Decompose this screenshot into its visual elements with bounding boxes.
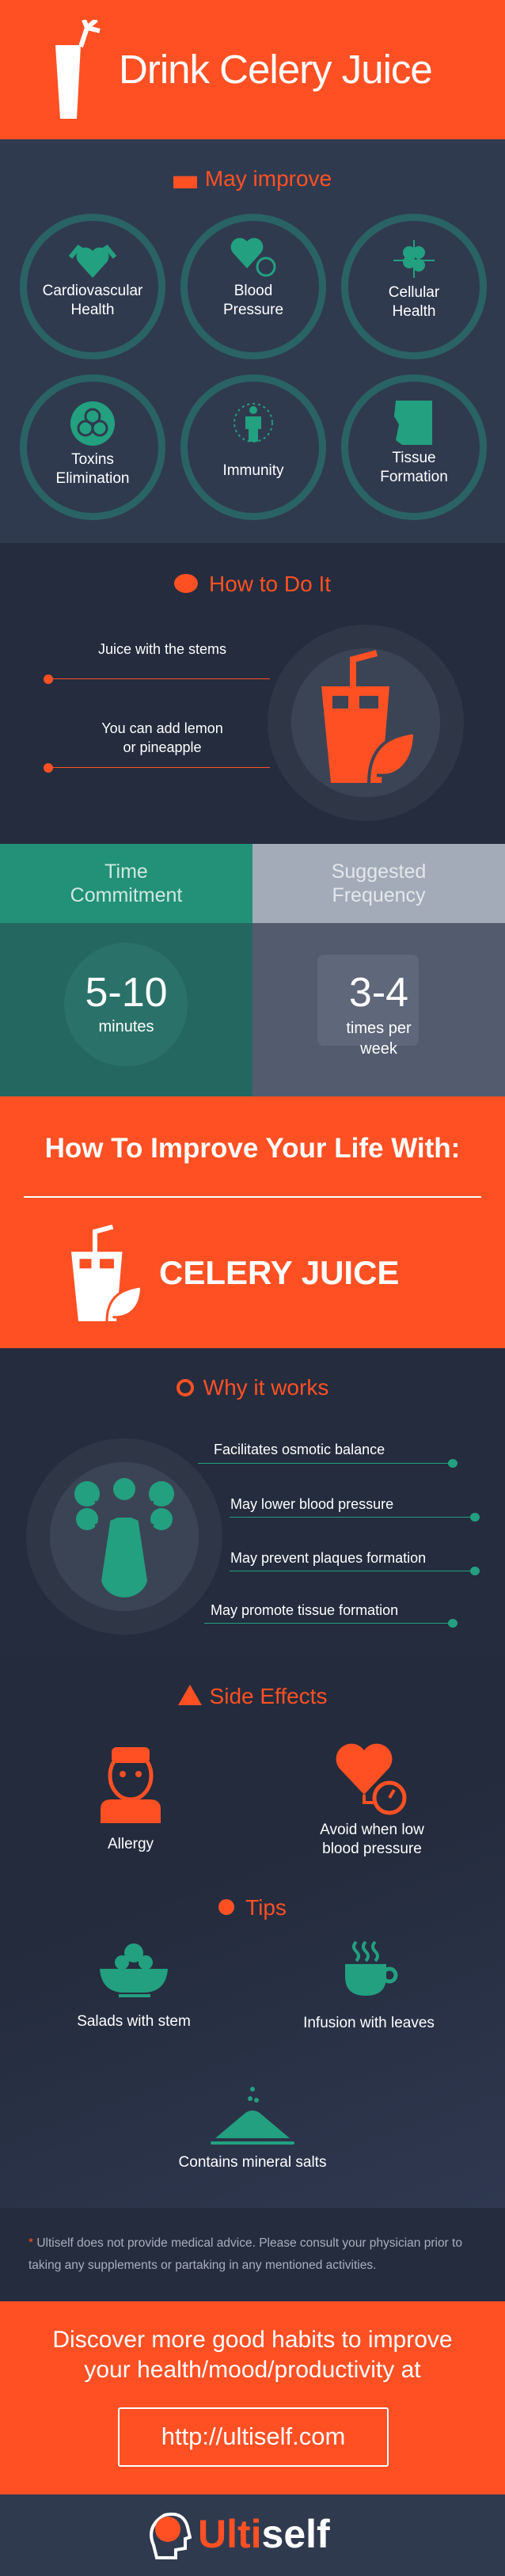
circle: cardiovascular: [20, 214, 165, 359]
circle: toxins: Elimination: [56, 470, 129, 487]
text: discover more: your health/mood/productivity at: [84, 2357, 421, 2383]
circle: cellular: [341, 214, 487, 359]
item: infusion: Infusion with leaves: [303, 2015, 435, 2031]
header: time commitment: Commitment: [70, 884, 182, 906]
item: salads: Salads with stem: [77, 2013, 191, 2030]
icon: juice cup circle: [268, 625, 464, 821]
panel: suggested frequency: [252, 844, 505, 1096]
item: mineral salts: Contains mineral salts: [179, 2154, 326, 2171]
text: discover more: Discover more good habits to improve: [52, 2327, 453, 2353]
header: suggested frequency: [252, 844, 505, 923]
list: why it works points: May lower blood pressure: [230, 1496, 393, 1512]
circle: cellular: Health: [393, 303, 435, 320]
list: why it works points: Facilitates osmotic balance: [214, 1442, 385, 1457]
value: 3-4 times per week: times per: [346, 1020, 412, 1037]
header: time commitment: Time: [104, 861, 148, 883]
footer: logo: [0, 2494, 505, 2576]
heading: how to improve: How To Improve Your Life With:: [45, 1133, 460, 1164]
panel: side effects and tips: [0, 1657, 505, 2208]
list: why it works points: May prevent plaques formation: [230, 1550, 426, 1566]
header: [0, 0, 505, 139]
value: 3-4 times per week: [252, 923, 505, 1096]
title: Drink Celery Juice: [119, 47, 432, 92]
callout: stems: [44, 641, 270, 684]
panel: time commitment: [0, 844, 252, 1096]
icon: brain head: [150, 2513, 192, 2559]
value: 3-4 times per week: 3-4: [349, 970, 408, 1016]
list: why it works points: May promote tissue formation: [211, 1602, 398, 1618]
circle: blood pressure: Blood: [234, 283, 272, 299]
icon: juice cup white: [71, 1224, 140, 1321]
text: discover more: [52, 2327, 453, 2383]
item: mineral salts: [179, 2087, 326, 2171]
circle: toxins: Toxins: [71, 451, 114, 468]
callout: lemon: You can add lemon: [101, 720, 223, 736]
item: low blood pressure: Avoid when low: [320, 1822, 424, 1838]
circle: tissue: Formation: [380, 469, 448, 485]
callout: stems: Juice with the stems: [98, 641, 226, 657]
item: low blood pressure: blood pressure: [322, 1841, 422, 1857]
value: 3-4 times per week: week: [360, 1040, 397, 1058]
button: url: http://ultiself.com: [161, 2422, 345, 2450]
circle: toxins: [20, 374, 165, 520]
header: time commitment: [0, 844, 252, 923]
panel: why it works: [0, 1348, 505, 1657]
icon: glass with celery: [55, 20, 101, 119]
callout: lemon: or pineapple: [123, 739, 202, 755]
item: infusion: [303, 1941, 435, 2031]
heading: side effects: Side Effects: [210, 1684, 327, 1708]
circle: tissue: Tissue: [392, 450, 436, 466]
item: allergy: [101, 1747, 161, 1852]
list: why it works points: [198, 1442, 480, 1628]
logo text: Ultiself: [198, 2512, 330, 2556]
circle: blood pressure: [180, 214, 326, 359]
button: url: [118, 2407, 389, 2467]
icon: celery circle: [26, 1438, 222, 1635]
panel: may improve: [0, 139, 505, 543]
heading: why it works: Why it works: [203, 1375, 328, 1400]
heading: tips: [218, 1895, 287, 1920]
circle: cardiovascular: Cardiovascular: [43, 283, 142, 299]
header: suggested frequency: Suggested: [332, 861, 426, 883]
circle: tissue: [341, 374, 487, 520]
panel: how to do it: [0, 543, 505, 844]
value: 5-10 minutes: 5-10: [85, 970, 168, 1016]
item: allergy: Allergy: [108, 1836, 154, 1852]
heading: may improve: May improve: [205, 166, 332, 191]
circle: immunity: Immunity: [222, 462, 284, 479]
item: low blood pressure: [320, 1743, 424, 1857]
item: salads: [77, 1943, 191, 2030]
heading: celery juice: CELERY JUICE: [159, 1254, 399, 1291]
value: 5-10 minutes: minutes: [98, 1018, 154, 1035]
heading: how to do it: How to Do It: [209, 572, 331, 596]
value: 5-10 minutes: [0, 923, 252, 1096]
heading: tips: Tips: [245, 1895, 287, 1920]
callout: lemon: [44, 720, 270, 773]
header: suggested frequency: Frequency: [332, 884, 426, 906]
circle: cardiovascular: Health: [71, 302, 114, 318]
panel: call to action: [0, 2301, 505, 2494]
circle: blood pressure: Pressure: [223, 302, 283, 318]
disclaimer: * Ultiself does not provide medical advice. Please consult your physician prior to taking any supplements or partaking in any mentioned activities.: [28, 2236, 462, 2272]
panel: improve your life banner: [0, 1096, 505, 1348]
circle: immunity: [180, 374, 326, 520]
circle: cellular: Cellular: [389, 284, 439, 301]
